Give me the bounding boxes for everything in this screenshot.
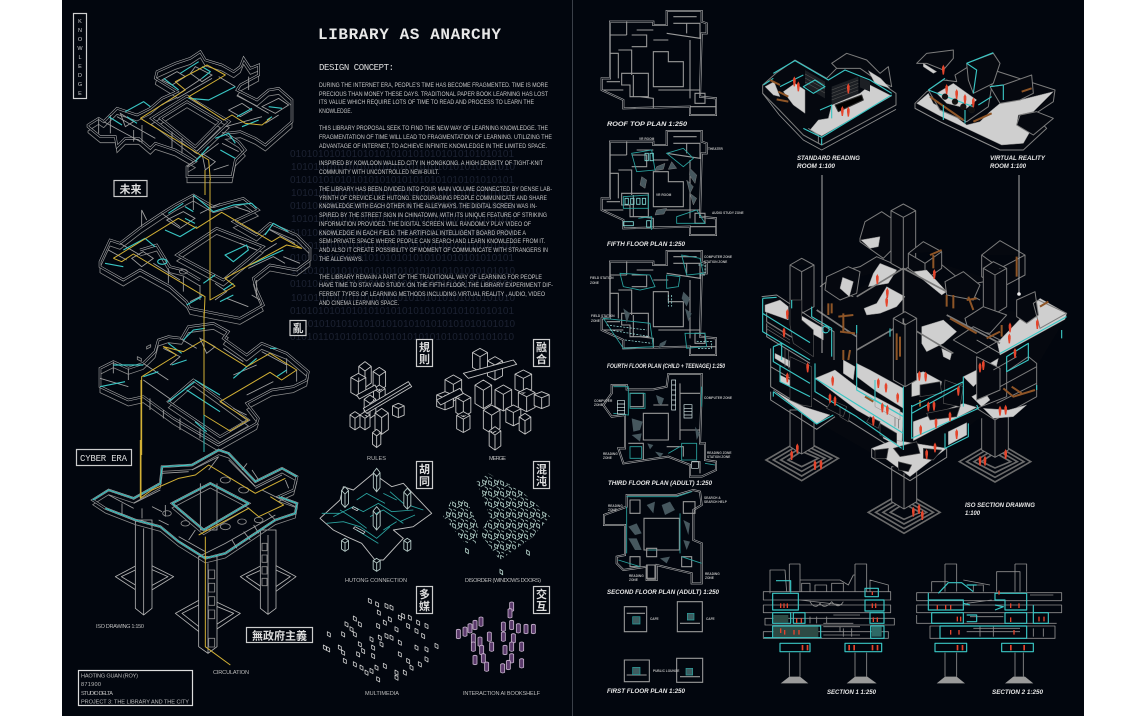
tiny plan room labels: READING (629, 574, 644, 578)
concept diagram captions: RULES (367, 456, 386, 462)
tiny plan room labels: SEARCH HELP (704, 500, 728, 504)
plan captions: SECOND FLOOR PLAN (ADULT) 1:250 (607, 590, 720, 596)
caption: iso drawing: ISO DRAWING 1:150 (96, 624, 144, 630)
leader line: standard reading room (821, 175, 823, 353)
tiny plan room labels: ZONE (591, 319, 600, 323)
plan captions: FIFTH FLOOR PLAN 1:250 (607, 242, 686, 248)
project information box: 871900 (81, 682, 101, 688)
iso drawing: top floor (88, 52, 292, 183)
plan captions: ROOM 1:100 (797, 164, 836, 170)
label: 未来: 未来 (120, 182, 142, 196)
plan captions: SECTION 2 1:250 (992, 690, 1044, 696)
main title: LIBRARY AS ANARCHY (318, 26, 501, 44)
label: 混沌 (534, 462, 550, 488)
tiny plan room labels: VR ROOM (639, 137, 655, 141)
iso drawing: fifth floor level (100, 180, 310, 324)
tiny plan room labels: READING (705, 572, 720, 576)
columns (790, 410, 1008, 509)
project information box: HAOTING GUAN (ROY) (81, 674, 138, 680)
label: cyber era: CYBER ERA (80, 454, 128, 464)
label: 規則: 規 (419, 340, 430, 354)
stepped column bases (766, 439, 1031, 533)
label: 亂: 亂 (292, 321, 304, 335)
text block: design concept: FRAGMENTATION OF TIME WILL LEAD TO FRAGMENTATION OF LEARNING. UTILIZING THE (319, 134, 552, 141)
mass fill (762, 265, 1067, 477)
tiny plan room labels: ZONE (603, 456, 612, 460)
column base rings (115, 562, 296, 637)
label: knowledge vertical box: E (78, 91, 82, 97)
plan captions: ISO SECTION DRAWING (965, 503, 1035, 509)
label: 融合 (534, 340, 550, 366)
label: knowledge vertical box: D (78, 73, 82, 79)
plan captions: ROOM 1:100 (990, 164, 1027, 170)
text block: design concept: SPIRED BY THE STREET SIGN IN CHINATOWN, WITH ITS UNIQUE FEATURE OF STRIKING (319, 212, 547, 219)
text block: design concept: KNOWLEDGE. (319, 108, 352, 115)
tiny plan room labels: AUDIO STUDY ZONE (712, 211, 744, 215)
plan captions: ROOF TOP PLAN 1:250 (607, 122, 688, 128)
text block: design concept: THE LIBRARY HAS BEEN DIVIDED INTO FOUR MAIN VOLUME CONNECTED BY DENSE LAB- (319, 186, 552, 193)
binary background pattern: 0101010101010101010101010101010101010101 (290, 201, 514, 212)
project information box: PROJECT 3: THE LIBRARY AND THE CITY (81, 700, 189, 706)
tiny plan room labels: ZONE (629, 578, 638, 582)
section 1 (763, 564, 894, 683)
binary background pattern: 0101010101010101010101010101010101010101 (290, 306, 514, 317)
floor plans upper column (602, 11, 716, 355)
binary background pattern (290, 149, 515, 343)
binary background pattern: 1010101010101010101010101010101010101010 (291, 162, 515, 173)
text block: design concept: FERENT TYPES OF LEARNING METHODS INCLUDING VIRTUAL REALITY , AUDIO, VIDEO (319, 291, 545, 298)
concept label boxes (416, 340, 550, 614)
brown bookshelves (828, 250, 1048, 407)
label: 規則: 則 (419, 352, 430, 366)
label: 規則 (416, 340, 432, 366)
label: 交互 (534, 586, 550, 614)
label: 融合: 合 (536, 352, 547, 366)
label: knowledge vertical box: K (78, 19, 82, 25)
dark objects on decks (790, 300, 963, 472)
label: 混沌: 混 (536, 462, 547, 476)
text block: design concept: YRINTH OF CREVICE-LIKE HUTONG. ENCOURAGING PEOPLE COMMUNICATE AND SHARE (319, 195, 547, 202)
binary background pattern: 0101010101010101010101010101010101010101 (290, 149, 514, 160)
binary background pattern: 1010101010101010101010101010101010101010 (291, 214, 515, 225)
text block: design concept: SEMI-PRIVATE SPACE WHERE PEOPLE CAN SEARCH AND LEARN KNOWLEDGE FROM IT. (319, 238, 545, 245)
diagram: rules (350, 362, 412, 448)
label: knowledge vertical box: G (78, 82, 82, 88)
vertical circulation lines (141, 170, 205, 497)
tiny plan room labels: SEARCH & (704, 496, 721, 500)
text block: design concept: PRECIOUS THAN MONEY THESE DAYS. TRADITIONAL PAPER BOOK LEARNING HAS LOST (319, 91, 548, 98)
binary background pattern: 0101010101010101010101010101010101010101 (290, 228, 514, 239)
right deck (997, 298, 1067, 355)
diagram: disorder windows and doors (443, 473, 550, 575)
text block: design concept (319, 82, 553, 307)
plan captions: VIRTUAL REALITY (990, 156, 1046, 162)
diagram: interaction AI bookshelf (456, 602, 535, 673)
concept diagram captions: MERGE (489, 456, 506, 462)
plan: fourth floor (602, 251, 716, 355)
tiny plan room labels: VR ROOM (656, 193, 672, 197)
label: 胡同 (416, 462, 432, 488)
label: 混沌: 沌 (536, 474, 547, 488)
label: knowledge vertical box: N (78, 28, 82, 34)
binary background pattern: 0101011010101010101010101010101010101010 (290, 332, 514, 343)
plan: first floor rooms (624, 602, 703, 682)
binary background pattern: 0101010101010101010101010101010101010101 (290, 175, 514, 186)
iso drawing: third floor level (100, 315, 308, 455)
heading: design concept: DESIGN CONCEPT: (319, 63, 394, 73)
central corridor structure (817, 268, 1000, 353)
plan captions: SECTION 1 1:250 (827, 690, 877, 696)
text block: design concept: INSPIRED BY KOWLOON WALLED CITY IN HONGKONG. A HIGH DENSITY OF TIGHT-KNIT (319, 160, 543, 167)
concept diagram captions (345, 456, 541, 697)
text block: design concept: DURING THE INTERNET ERA, PEOPLE'S TIME HAS BECOME FRAGMENTED. TIME IS MORE (319, 82, 548, 89)
plan captions: 1:100 (965, 511, 981, 517)
text block: design concept: INFORMATION PROVIDED. THE DIGITAL SCREEN WILL RANDOMLY PLAY VIDEO OF (319, 221, 531, 228)
project information box: STUDIO DELTA (81, 691, 113, 697)
cyan section cut lines (763, 297, 1067, 450)
tiny plan room labels: READING ZONE (707, 451, 731, 455)
iso room: virtual reality room (915, 50, 1055, 150)
plan: roof top (602, 11, 716, 115)
concept diagram captions: MULTIMEDIA (365, 691, 399, 697)
tiny plan room labels: COMPUTER ZONE (704, 396, 732, 400)
label: knowledge vertical box (74, 14, 86, 98)
binary background pattern: 1010101010101010101010101010101010101010 (291, 319, 515, 330)
tiny plan room labels: FIELD STATION (590, 276, 614, 280)
diagram: multimedia (323, 598, 438, 682)
label: 多媒 (416, 586, 432, 614)
label: knowledge vertical box: E (78, 64, 82, 70)
plan captions: STANDARD READING (797, 156, 860, 162)
plan captions (607, 122, 1046, 696)
plan captions: FIRST FLOOR PLAN 1:250 (607, 689, 686, 695)
label: 融合: 融 (536, 341, 547, 354)
text block: design concept: AND CINEMA LEARNING SPACE. (319, 300, 399, 307)
caption: circulation: CIRCULATION (213, 670, 249, 676)
front center tower (893, 312, 917, 387)
tiny plan room labels: PUBLIC LOUNGE (653, 669, 679, 673)
right lower structure (977, 357, 1037, 420)
plan: fifth floor (602, 131, 716, 235)
tiny plan room labels: COMPUTER ZONE (704, 255, 732, 259)
plan: third floor (603, 374, 716, 477)
tiny plan room labels: STATION ZONE (707, 455, 730, 459)
binary background pattern: 0101010101010101010101010101010101010101 (290, 253, 514, 264)
back towers and blocks (790, 204, 1025, 313)
iso room: standard reading room (763, 53, 896, 150)
tiny plan room labels: ZONE (705, 576, 714, 580)
red figures (783, 269, 1039, 520)
text block: design concept: THIS LIBRARY PROPOSAL SEEK TO FIND THE NEW WAY OF LEARNING KNOWLEDGE. THE (319, 125, 548, 132)
label: 交互: 互 (536, 600, 547, 613)
binary background pattern: 1010101010101010101010101010101010101010 (291, 266, 515, 277)
binary background pattern: 1010101010101010101010101010101010101010 (291, 241, 515, 252)
iso drawing: ground floor with columns (93, 440, 297, 665)
six concept diagrams (320, 348, 550, 682)
label: cyber era (76, 450, 132, 466)
text block: design concept: THE ALLEYWAYS. (319, 256, 363, 263)
upper white decks (840, 237, 1032, 407)
tiny plan room labels (590, 137, 744, 673)
concept diagram captions: DISORDER (WINDOWS DOORS) (465, 578, 541, 584)
project information box (78, 670, 192, 706)
section 2 (917, 564, 1062, 683)
tiny plan room labels: ZONE (590, 281, 599, 285)
tiny plan room labels: CAFE (706, 617, 715, 621)
label: 胡同: 同 (419, 475, 430, 488)
plan: second floor (604, 490, 702, 583)
label: 交互: 交 (536, 587, 547, 601)
front center decks (843, 360, 1027, 477)
ladder squares (209, 543, 267, 647)
binary background pattern: 1010101010101010101010101010101010101010 (291, 188, 515, 199)
diagram: hutong connection (320, 468, 432, 571)
text block: design concept: ITS VALUE WHICH REQUIRE LOTS OF TIME TO READ AND PROCESS TO LEARN THE (319, 99, 534, 106)
tiny plan room labels: THEATER (708, 147, 724, 151)
label: 胡同: 胡 (419, 462, 430, 476)
text block: design concept: KNOWLEDGE IN EACH FIELD. THE ARTIFICIAL INTELLIGENT BOARD PROVIDE A (319, 230, 527, 237)
tiny plan room labels: ZONE (608, 508, 617, 512)
shelf hatching (766, 322, 963, 433)
tiny plan room labels: READING (608, 504, 623, 508)
big iso section drawing (762, 204, 1067, 533)
label: knowledge vertical box: O (78, 37, 83, 43)
text block: design concept: AND ALSO IT CREATE POSSIBILITY OF MOMENT OF COMMUNICATE WITH STRANGERS IN (319, 247, 548, 254)
tiny plan room labels: STATION ZONE (704, 260, 727, 264)
tiny plan room labels: FIELD STATION (591, 314, 615, 318)
tiny plan room labels: ZONE (594, 403, 603, 407)
columns (135, 483, 276, 653)
label: 多媒: 媒 (419, 599, 430, 613)
plan captions: THIRD FLOOR PLAN (ADULT) 1:250 (608, 481, 713, 487)
text block: design concept: COMMUNITY WITH UNCONTROLLED NEW-BUILT. (319, 169, 439, 176)
text block: design concept: ADVANTAGE OF INTERNET, TO ACHIEVE INFINITE KNOWLEDGE IN THE LIMITED SPACE. (319, 143, 547, 150)
left wing decks (765, 300, 903, 448)
text block: design concept: KNOWLEDGE WITH EACH OTHER IN THE ALLEYWAYS. THE DIGITAL SCREEN WAS IN- (319, 203, 537, 210)
plan captions: FOURTH FLOOR PLAN (CHILD + TEENAGE) 1:250 (607, 364, 726, 370)
label: 無政府主義 (246, 628, 312, 642)
tiny plan room labels: CAFE (650, 617, 659, 621)
tiny plan room labels: COMPUTER (594, 399, 613, 403)
label: 亂 (290, 320, 306, 336)
text block: design concept: HAVE TIME TO STAY AND STUDY. ON THE FIFTH FLOOR, THE LIBRARY EXPERIMENT DIF- (319, 282, 553, 289)
text block: design concept: THE LIBRARY REMAIN A PART OF THE TRADITIONAL WAY OF LEARNING FOR PEOPLE (319, 274, 542, 281)
label: knowledge vertical box: W (77, 46, 83, 52)
concept diagram captions: HUTONG CONNECTION (345, 578, 407, 584)
left wing structure lines (762, 295, 1000, 481)
binary background pattern: 0101010101010101010101010101010101010101 (290, 279, 514, 290)
diagram: merge (437, 348, 549, 450)
tiny plan room labels: READING (603, 452, 618, 456)
section drawings (763, 564, 1062, 683)
concept diagram captions: INTERACTION AI BOOKSHELF (463, 691, 541, 697)
label: knowledge vertical box: L (78, 55, 82, 61)
binary background pattern: 1010101010101010101010101010101010101010 (291, 293, 515, 304)
leader line: virtual reality room (1017, 175, 1021, 296)
label: 多媒: 多 (419, 587, 430, 601)
label: 無政府主義: 無政府主義 (252, 628, 307, 642)
label: 未来 (114, 180, 147, 196)
floor plans lower column (603, 374, 716, 682)
